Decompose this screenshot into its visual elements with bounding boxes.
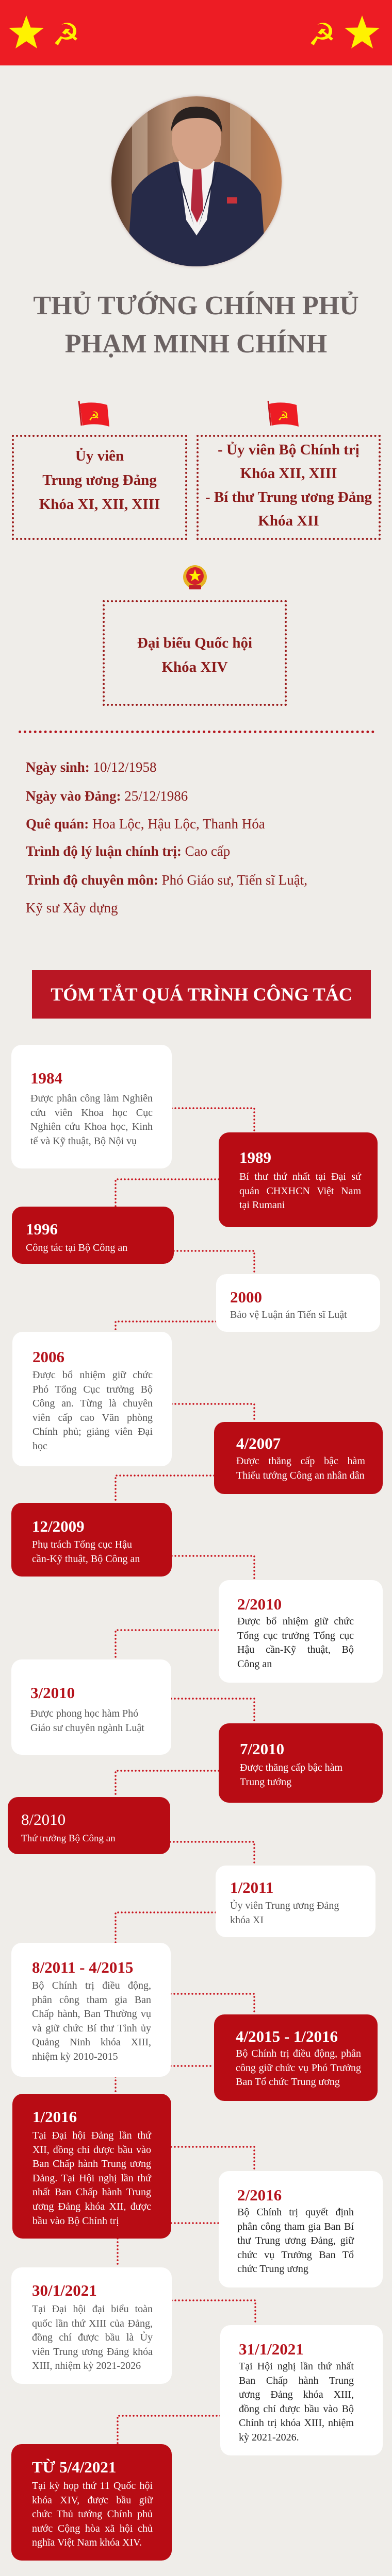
card: 1/2016: nhất Ban Chấp hành Trung <box>32 2187 151 2198</box>
card: 2000: Bảo vệ Luận án Tiến sĩ Luật <box>230 1309 347 1320</box>
card: 4/2015 - 1/2016: công giữ chức vụ Phó Trưởng <box>236 2062 361 2074</box>
box: central committee: Ủy viên <box>75 448 124 464</box>
card: 7/2010: 7/2010 <box>240 1740 284 1758</box>
card: 2/2010: Công an <box>237 1658 272 1670</box>
card: 2/2010 <box>219 1580 383 1683</box>
card: 31/1/2021: ương Đảng khóa XIII, <box>239 2389 354 2400</box>
card: 1/2011: Ủy viên Trung ương Đảng <box>230 1900 339 1911</box>
card: 1/2016 <box>12 2094 171 2239</box>
box: central committee: Trung ương Đảng <box>42 472 157 488</box>
card: TỪ 5/4/2021 <box>11 2444 172 2561</box>
card: 4/2015 - 1/2016: Ban Tổ chức Trung ương <box>236 2076 340 2088</box>
title: THỦ TƯỚNG CHÍNH PHỦ <box>33 291 359 320</box>
card: 1996: 1996 <box>26 1220 58 1238</box>
card: 8/2010: 8/2010 <box>21 1810 66 1828</box>
box: national assembly <box>103 600 287 706</box>
card: 1989: Bí thư thứ nhất tại Đại sứ <box>239 1171 361 1182</box>
card: 30/1/2021: 30/1/2021 <box>32 2281 97 2299</box>
card: 1996: Công tác tại Bộ Công an <box>26 1242 127 1253</box>
card: 31/1/2021: đồng chí được bầu vào Bộ <box>239 2403 354 2415</box>
card: 1984: tế và Kỹ thuật, Bộ Nội vụ <box>30 1136 137 1147</box>
card: 8/2011 - 4/2015: 8/2011 - 4/2015 <box>32 1958 133 1976</box>
card: 7/2010: Được thăng cấp bậc hàm <box>240 1762 342 1773</box>
icon: star right <box>345 15 380 48</box>
card: 4/2007: Được thăng cấp bậc hàm <box>236 1455 365 1467</box>
card: 30/1/2021: quốc lần thứ XIII của Đảng, <box>32 2318 153 2329</box>
card: 8/2011 - 4/2015 <box>11 1943 171 2077</box>
section header <box>32 970 371 1019</box>
card: 30/1/2021: XIII, nhiệm kỳ 2021-2026 <box>32 2360 141 2371</box>
card: 1984: Được phân công làm Nghiên <box>30 1093 153 1104</box>
card: 3/2010 <box>11 1659 171 1755</box>
card: 1996 <box>12 1207 174 1264</box>
card: 30/1/2021: viên Trung ương Đảng khóa <box>32 2346 153 2358</box>
card: 7/2010 <box>219 1723 383 1803</box>
card: TỪ 5/4/2021: TỪ 5/4/2021 <box>32 2458 116 2476</box>
card: 2006 <box>12 1332 172 1466</box>
card: 1/2016: Tại Đại hội Đảng lần thứ <box>32 2130 151 2141</box>
card: TỪ 5/4/2021: khóa XIV, được bầu giữ <box>32 2495 153 2506</box>
card: 2/2016: chức vụ Trưởng Ban Tổ <box>237 2249 354 2261</box>
card: 4/2007: 4/2007 <box>236 1434 281 1452</box>
card: TỪ 5/4/2021: chức Thủ tướng Chính phủ <box>32 2509 153 2520</box>
card: 1/2011: khóa XI <box>230 1914 264 1926</box>
top banner <box>0 0 392 65</box>
card: 8/2010 <box>8 1797 170 1854</box>
box: politburo: - Ủy viên Bộ Chính trị <box>218 442 360 458</box>
card: 2000: 2000 <box>230 1288 262 1306</box>
card: 2006: Phó Tổng Cục trưởng Bộ <box>32 1384 153 1395</box>
card: 1/2016: bầu vào Bộ Chính trị <box>32 2215 119 2227</box>
card: 31/1/2021: Ban Chấp hành Trung <box>239 2375 354 2386</box>
box: politburo: - Bí thư Trung ương Đảng <box>205 489 372 505</box>
icon: party flag left <box>78 401 109 427</box>
card: 4/2015 - 1/2016: Bộ Chính trị điều động, phân <box>236 2048 361 2059</box>
card: 2/2016: Bộ Chính trị quyết định <box>237 2207 354 2218</box>
icon: party flag left: ☭ <box>88 409 100 423</box>
card: 3/2010: Được phong học hàm Phó <box>30 1708 138 1719</box>
card: 7/2010: Trung tướng <box>240 1776 291 1788</box>
card: 1984 <box>11 1045 172 1168</box>
card: 2/2016: 2/2016 <box>237 2186 282 2204</box>
card: 2006: Chính phủ; giảng viên Đại <box>32 1426 153 1437</box>
card: 4/2015 - 1/2016: 4/2015 - 1/2016 <box>236 2027 338 2045</box>
icon: hammer sickle left: ☭ <box>52 17 80 53</box>
card: 2006: 2006 <box>32 1348 64 1366</box>
card: 31/1/2021: 31/1/2021 <box>239 2340 304 2358</box>
icon: party flag right: ☭ <box>277 409 289 423</box>
card: 30/1/2021 <box>11 2267 172 2384</box>
card: 1989: quán CHXHCN Việt Nam <box>239 1185 361 1197</box>
card: 1989: tại Rumani <box>239 1199 285 1211</box>
card: 12/2009: Phụ trách Tổng cục Hậu <box>32 1539 132 1550</box>
card: 12/2009 <box>11 1503 172 1577</box>
card: 31/1/2021: Tại Hội nghị lần thứ nhất <box>239 2361 354 2372</box>
card: 12/2009: cần-Kỹ thuật, Bộ Công an <box>32 1553 140 1565</box>
title: PHẠM MINH CHÍNH <box>65 329 327 359</box>
card: 31/1/2021: Chính trị khóa XIII, nhiệm <box>239 2417 354 2429</box>
box: national assembly: Đại biểu Quốc hội <box>137 635 252 651</box>
card: 2006: Công an. Từng là chuyên <box>32 1398 153 1409</box>
card: 8/2011 - 4/2015: Quảng Ninh khóa XIII, <box>32 2037 151 2048</box>
icon: party flag right <box>267 401 299 427</box>
card: 2006: học <box>32 1440 47 1452</box>
card: 1989 <box>219 1132 378 1227</box>
card: 1/2016: XII, đồng chí được bầu vào <box>32 2144 151 2156</box>
portrait photo <box>111 96 282 266</box>
card: 2/2016 <box>219 2171 383 2287</box>
card: 1/2016: 1/2016 <box>32 2108 77 2126</box>
card: 4/2015 - 1/2016 <box>214 2014 378 2101</box>
card: 2/2016: chức Trung ương <box>237 2263 308 2275</box>
card: 31/1/2021 <box>220 2325 383 2455</box>
card: 1984: 1984 <box>30 1069 62 1087</box>
card: 1/2016: ương Đảng khóa XII, được <box>32 2201 151 2212</box>
card: 2/2016: thư Trung ương Đảng, giữ <box>237 2235 354 2246</box>
personal info text block: Ngày sinh: 10/12/1958 <box>26 759 157 775</box>
card: 2/2016: phân công tham gia Ban Bí <box>237 2221 354 2232</box>
card: 1/2011 <box>216 1866 375 1937</box>
box: politburo: Khóa XII, XIII <box>240 465 337 482</box>
card: 12/2009: 12/2009 <box>32 1517 85 1535</box>
card: 30/1/2021: đồng chí được bầu là Ủy <box>32 2332 153 2343</box>
card: 31/1/2021: kỳ 2021-2026. <box>239 2432 299 2443</box>
personal info text block: Trình độ chuyên môn: Phó Giáo sư, Tiến sĩ Luật, <box>26 872 307 888</box>
card: TỪ 5/4/2021: nước Cộng hòa xã hội chủ <box>32 2523 153 2534</box>
card: 4/2007 <box>214 1422 383 1494</box>
title <box>33 291 359 359</box>
personal info text block: Quê quán: Hoa Lộc, Hậu Lộc, Thanh Hóa <box>26 816 265 832</box>
card: 1/2016: Ban Chấp hành Trung ương <box>32 2158 151 2170</box>
card: 2000 <box>216 1274 380 1332</box>
box: central committee <box>12 435 187 540</box>
personal info text block: Kỹ sư Xây dựng <box>26 900 118 916</box>
box: central committee: Khóa XI, XII, XIII <box>39 496 160 513</box>
card: 1/2011: 1/2011 <box>230 1878 273 1896</box>
box: national assembly: Khóa XIV <box>161 659 228 675</box>
card: 1984: Nghiên cứu Khoa học, Kinh <box>30 1121 153 1132</box>
personal info text block: Trình độ lý luận chính trị: Cao cấp <box>26 843 230 859</box>
card: 4/2007: Thiếu tướng Công an nhân dân <box>236 1470 365 1481</box>
card: 3/2010: 3/2010 <box>30 1684 75 1702</box>
personal info text block <box>26 759 307 916</box>
timeline connectors <box>115 1107 256 2444</box>
card: TỪ 5/4/2021: Tại kỳ họp thứ 11 Quốc hội <box>32 2480 153 2492</box>
card: 8/2011 - 4/2015: Bộ Chính trị điều động, <box>32 1980 151 1991</box>
card: TỪ 5/4/2021: nghĩa Việt Nam khóa XIV. <box>32 2537 142 2548</box>
card: 1984: cứu viên Khoa học Cục <box>30 1107 153 1118</box>
personal info text block: Ngày vào Đảng: 25/12/1986 <box>26 788 188 804</box>
icon: hammer sickle right: ☭ <box>308 17 336 53</box>
icon: star left <box>9 15 44 48</box>
card: 8/2010: Thứ trưởng Bộ Công an <box>21 1833 116 1844</box>
card: 2/2010: Tổng cục trưởng Tổng cục <box>237 1630 354 1641</box>
card: 2006: Được bổ nhiệm giữ chức <box>32 1369 153 1381</box>
card: 2/2010: Được bổ nhiệm giữ chức <box>237 1616 354 1627</box>
box: politburo <box>197 435 381 540</box>
card: 8/2011 - 4/2015: Chấp hành, Ban Thường vụ <box>32 2008 151 2020</box>
card: 8/2011 - 4/2015: phân công tham gia Ban <box>32 1994 151 2006</box>
card: 8/2011 - 4/2015: nhiệm kỳ 2010-2015 <box>32 2051 118 2062</box>
section header: TÓM TẮT QUÁ TRÌNH CÔNG TÁC <box>51 984 352 1005</box>
card: 1989: 1989 <box>239 1148 271 1166</box>
card: 8/2011 - 4/2015: và giữ chức Bí thư Tỉnh ủy <box>32 2023 151 2034</box>
card: 2/2010: Hậu cần-Kỹ thuật, Bộ <box>237 1644 354 1655</box>
box: politburo: Khóa XII <box>258 513 319 529</box>
icon: national emblem <box>183 565 207 589</box>
card: 30/1/2021: Tại Đại hội đại biểu toàn <box>32 2303 153 2315</box>
card: 2006: viên cấp cao Văn phòng <box>32 1412 153 1423</box>
card: 1/2016: Đảng. Tại Hội nghị lần thứ <box>32 2173 151 2184</box>
card: 3/2010: Giáo sư chuyên ngành Luật <box>30 1722 144 1734</box>
card: 2/2010: 2/2010 <box>237 1595 282 1613</box>
